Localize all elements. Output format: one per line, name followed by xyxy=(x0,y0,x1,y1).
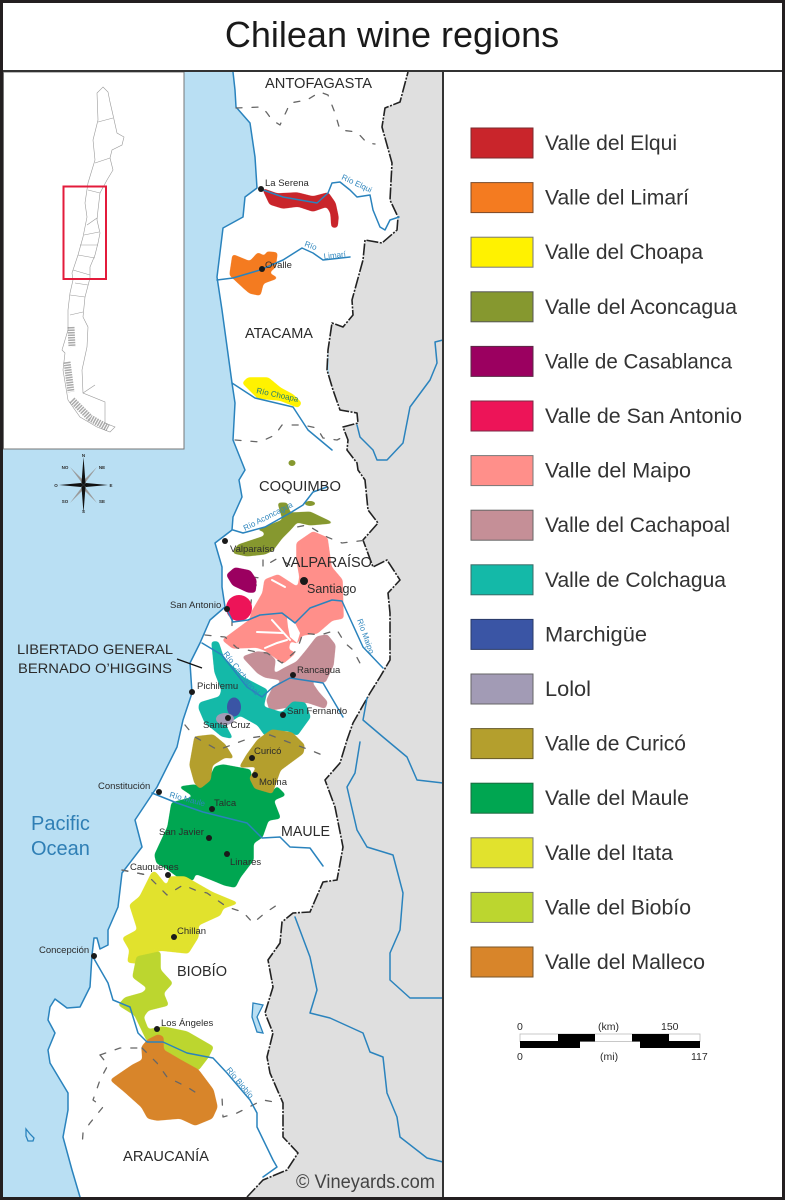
region names xyxy=(123,76,372,1165)
map: central Chile xyxy=(3,72,443,1198)
city labels: Santiago xyxy=(307,582,356,596)
city labels: Santa Cruz xyxy=(203,720,251,731)
legend: Valle del Itata xyxy=(471,838,673,868)
region names: ANTOFAGASTA xyxy=(265,76,372,92)
wine region: Lolol xyxy=(216,713,234,725)
river labels: Río Maipo xyxy=(355,618,376,655)
city labels: Linares xyxy=(230,857,261,868)
callout: Libertador General Bernardo O'Higgins: BERNADO O’HIGGINS xyxy=(18,660,172,676)
region names: VALPARAÍSO xyxy=(282,554,372,571)
title: Chilean wine regions xyxy=(225,14,559,55)
region names: ATACAMA xyxy=(245,326,313,342)
region names: MAULE xyxy=(281,824,330,840)
legend: Valle del Maipo xyxy=(471,456,691,486)
region names: BIOBÍO xyxy=(177,963,227,980)
wine region: Valle de San Antonio xyxy=(226,595,252,621)
ocean label: Pacific xyxy=(31,813,90,835)
callout: Libertador General Bernardo O'Higgins: LIBERTADO GENERAL xyxy=(17,641,173,657)
scale bar: 0 xyxy=(517,1021,523,1033)
city labels: Chillan xyxy=(177,926,206,937)
legend: Valle del Cachapoal: Valle del Cachapoal xyxy=(545,514,730,537)
scale bar: 117 xyxy=(691,1051,708,1063)
city labels: Pichilemu xyxy=(197,681,238,692)
wine region: Valle del Cachapoal xyxy=(243,635,335,710)
legend: Valle del Malleco: Valle del Malleco xyxy=(545,951,705,974)
compass rose: NE xyxy=(99,465,105,470)
legend: Valle de Curicó xyxy=(471,729,686,759)
city labels xyxy=(39,178,356,1029)
river labels: Río Choapa xyxy=(256,386,300,404)
legend: Valle del Malleco xyxy=(471,947,705,977)
scale bar: (km) xyxy=(598,1021,619,1033)
legend: Valle del Maule xyxy=(471,783,689,813)
wine region: Valle del Elqui xyxy=(263,189,338,227)
compass rose: SE xyxy=(99,499,105,504)
legend: Valle del Choapa: Valle del Choapa xyxy=(545,241,703,264)
river labels xyxy=(168,173,376,1100)
legend: Valle del Biobío xyxy=(471,892,691,922)
wine region: Valle del Maule xyxy=(155,765,285,887)
city labels: Concepción xyxy=(39,945,89,956)
legend: Valle del Itata: Valle del Itata xyxy=(545,842,673,865)
city labels: La Serena xyxy=(265,178,310,189)
legend: Valle del Choapa xyxy=(471,237,703,267)
legend: Valle de Colchagua xyxy=(471,565,726,595)
legend: Valle del Aconcagua: Valle del Aconcagua xyxy=(545,296,737,319)
legend: Valle de Casablanca xyxy=(471,346,732,376)
inset: outline of Chile xyxy=(62,87,124,432)
wine region: Marchigüe xyxy=(227,698,241,716)
wine region: Valle del Malleco xyxy=(111,1035,217,1125)
city labels: San Fernando xyxy=(287,706,347,717)
city labels: San Javier xyxy=(159,827,204,838)
scale bar: 150 xyxy=(661,1021,679,1033)
legend: Valle del Limarí xyxy=(471,183,689,213)
compass rose: SO xyxy=(62,499,69,504)
region names: ARAUCANÍA xyxy=(123,1148,209,1165)
legend: Lolol: Lolol xyxy=(545,678,591,701)
region names: COQUIMBO xyxy=(259,479,341,495)
river labels: Río Aconcagua xyxy=(242,500,295,533)
city labels: Los Ángeles xyxy=(161,1018,214,1029)
regional boundaries over vineyards xyxy=(122,630,362,1097)
river labels: Río xyxy=(303,239,319,252)
wine region: Valle del Biobío xyxy=(119,952,213,1070)
scale bar: 0 xyxy=(517,1051,523,1063)
callout: Libertador General Bernardo O'Higgins xyxy=(17,641,202,676)
legend: Valle del Limarí: Valle del Limarí xyxy=(545,187,689,210)
wine region: Valle del Itata xyxy=(123,872,237,963)
offshore island xyxy=(26,1129,34,1141)
river labels: Limarí xyxy=(323,250,347,261)
legend: Valle del Aconcagua xyxy=(471,292,737,322)
legend: Valle del Maule: Valle del Maule xyxy=(545,787,689,810)
wine region: Valle de Curicó xyxy=(190,730,304,793)
legend: Lolol xyxy=(471,674,591,704)
city labels: Ovalle xyxy=(265,260,292,271)
legend: Valle de San Antonio xyxy=(471,401,742,431)
legend: Valle del Elqui: Valle del Elqui xyxy=(545,132,677,155)
compass rose: N xyxy=(82,453,85,458)
river labels: Río Biobío xyxy=(224,1066,256,1100)
wine region: Valle de Colchagua xyxy=(199,642,310,738)
compass rose: NO xyxy=(62,465,69,470)
legend: Valle de Casablanca: Valle de Casablanca xyxy=(545,350,732,373)
inset: location rectangle xyxy=(64,186,106,279)
legend: Valle de Colchagua: Valle de Colchagua xyxy=(545,569,726,592)
legend: Marchigüe: Marchigüe xyxy=(545,623,647,646)
ocean label xyxy=(31,813,90,860)
land area xyxy=(48,72,408,1197)
legend: Valle del Biobío: Valle del Biobío xyxy=(545,896,691,919)
ocean label: Ocean xyxy=(31,838,90,860)
city markers xyxy=(91,186,308,1032)
national border xyxy=(247,72,408,1197)
compass rose: O xyxy=(54,483,58,488)
compass rose xyxy=(54,453,113,514)
legend: Valle de Curicó: Valle de Curicó xyxy=(545,733,686,756)
city labels: Talca xyxy=(214,798,237,809)
wine region: Valle del Maipo xyxy=(223,532,343,663)
river labels: Río Elqui xyxy=(340,173,374,195)
scale bar: (mi) xyxy=(600,1051,618,1063)
legend panel xyxy=(471,128,742,977)
city labels: Valparaíso xyxy=(230,544,275,555)
legend: Valle del Cachapoal xyxy=(471,510,730,540)
legend: Valle del Elqui xyxy=(471,128,677,158)
scale bar xyxy=(517,1021,708,1063)
river labels: Río Cachapoal xyxy=(221,650,261,697)
city labels: Curicó xyxy=(254,746,281,757)
wine region: Valle del Aconcagua xyxy=(233,460,333,556)
watermark: Vineyards.com: © Vineyards.com xyxy=(296,1172,435,1193)
legend: Marchigüe xyxy=(471,619,647,649)
compass rose: E xyxy=(109,483,113,488)
city labels: Rancagua xyxy=(297,665,341,676)
city labels: San Antonio xyxy=(170,600,221,611)
city labels: Molina xyxy=(259,777,288,788)
inset map: Chile overview xyxy=(4,72,184,449)
river labels: Río Maule xyxy=(168,790,207,809)
compass rose: S xyxy=(82,509,85,514)
wine region: Valle del Choapa xyxy=(243,378,301,407)
coastline xyxy=(48,72,257,1197)
Maipo white gaps xyxy=(257,580,300,648)
legend: Valle del Maipo: Valle del Maipo xyxy=(545,460,691,483)
wine region: Valle de Casablanca xyxy=(227,568,256,592)
wine region: Valle del Limarí xyxy=(230,252,277,295)
rivers xyxy=(93,182,443,1177)
city labels: Constitución xyxy=(98,781,150,792)
city labels: Cauquenes xyxy=(130,862,179,873)
regional boundaries xyxy=(82,92,375,1147)
legend: Valle de San Antonio: Valle de San Antonio xyxy=(545,405,742,428)
